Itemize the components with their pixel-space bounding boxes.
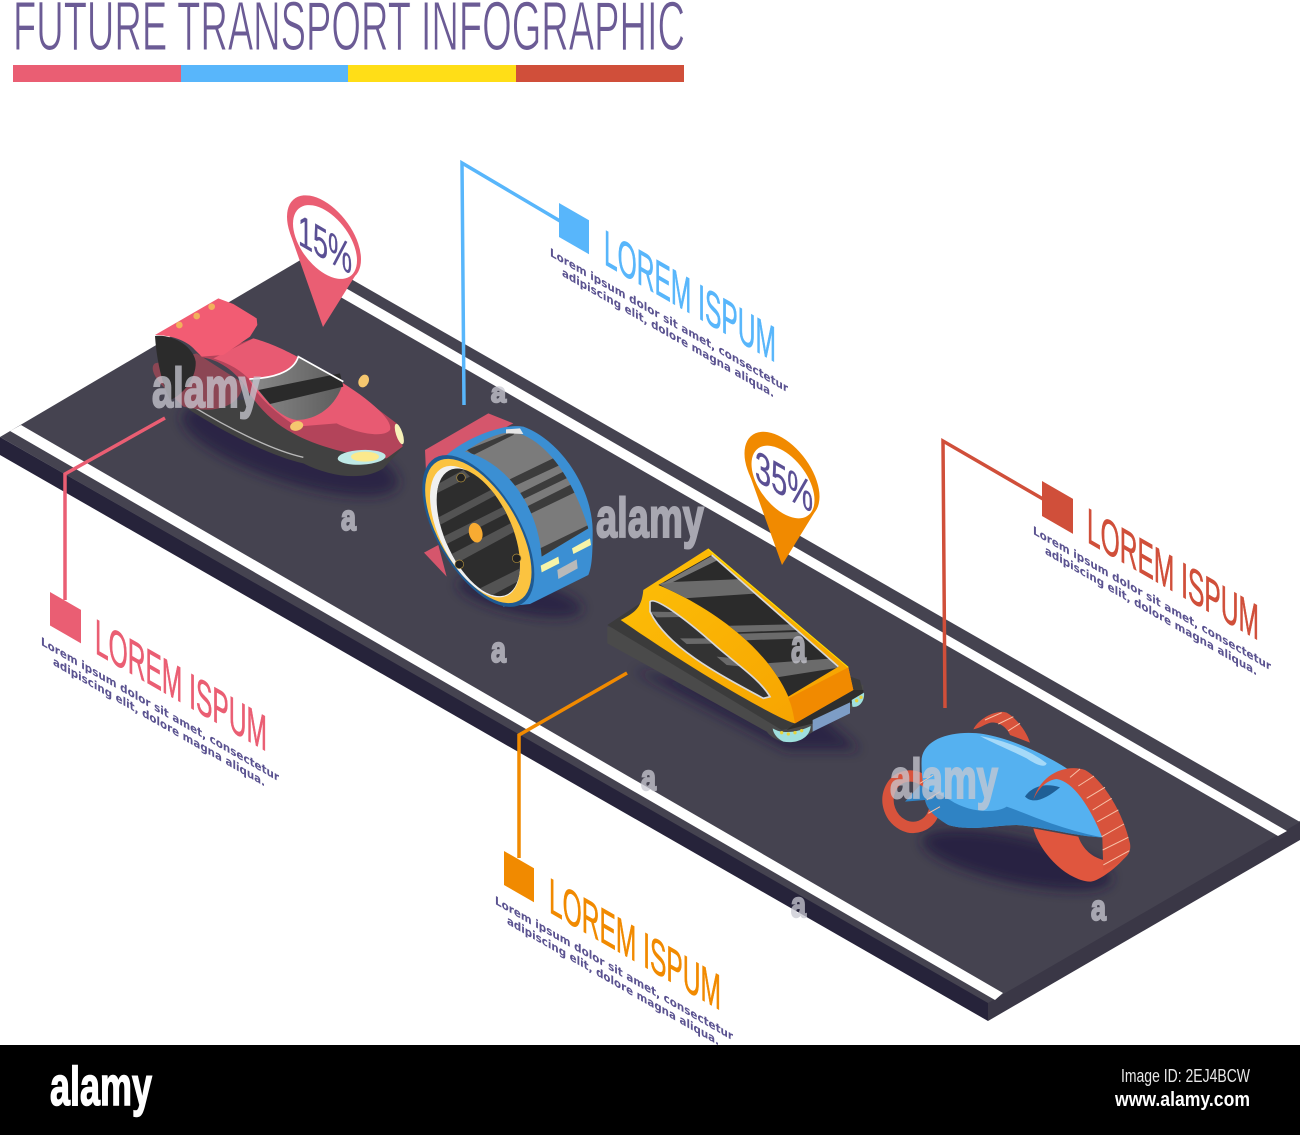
info block: orange <box>495 836 734 1057</box>
vehicle: red hover car <box>153 298 408 515</box>
pin: 35% <box>744 416 820 565</box>
watermarks: alamy <box>596 486 704 549</box>
watermarks: a <box>491 377 506 408</box>
pin: 15%: 15% <box>298 205 352 285</box>
vehicle: yellow capsule <box>607 548 864 750</box>
info block: orange: adipiscing elit, dolore magna aliqua. <box>507 913 719 1048</box>
connector: pink <box>65 418 165 600</box>
info block: pink: Lorem ipsum dolor sit amet, consectetur <box>41 634 280 785</box>
info block: red <box>1033 466 1272 687</box>
watermarks: a <box>791 620 806 672</box>
info block: pink <box>41 577 280 798</box>
watermarks: a <box>491 629 507 670</box>
info block: red: Lorem ipsum dolor sit amet, consectetur <box>1033 523 1272 674</box>
info block: blue: LOREM ISPUM <box>604 219 776 374</box>
road <box>0 255 1300 1021</box>
info block: red: adipiscing elit, dolore magna aliqua. <box>1045 543 1257 678</box>
vehicle: wheel pod <box>422 413 593 637</box>
connector: red <box>943 441 1043 708</box>
vehicle: blue three-wheeler <box>881 712 1130 903</box>
pin: 15% <box>287 180 361 327</box>
info block: pink: adipiscing elit, dolore magna aliqua. <box>53 654 265 789</box>
footer bar: alamy <box>50 1055 152 1117</box>
info block: orange: LOREM ISPUM <box>549 867 721 1022</box>
watermarks: a <box>641 757 657 798</box>
watermarks: alamy <box>890 747 998 810</box>
info block: blue: Lorem ipsum dolor sit amet, consectetur <box>550 245 789 396</box>
watermarks: alamy <box>152 356 260 419</box>
watermarks: a <box>1091 887 1107 928</box>
footer bar: Image ID: 2EJ4BCW <box>1121 1066 1250 1086</box>
title colour bar <box>13 65 684 82</box>
pin: 35%: 35% <box>755 441 813 524</box>
connector: blue <box>462 163 560 405</box>
info block: blue: adipiscing elit, dolore magna aliqua. <box>562 265 774 400</box>
info block: pink: LOREM ISPUM <box>95 608 267 763</box>
watermarks <box>152 356 1107 928</box>
footer bar <box>0 1045 1300 1135</box>
watermarks: a <box>341 497 357 538</box>
info block: blue <box>550 188 789 409</box>
footer bar: www.alamy.com <box>1114 1089 1250 1111</box>
watermarks: a <box>791 884 807 925</box>
connector: orange <box>519 673 627 858</box>
info block: orange: Lorem ipsum dolor sit amet, consectetur <box>495 893 734 1044</box>
